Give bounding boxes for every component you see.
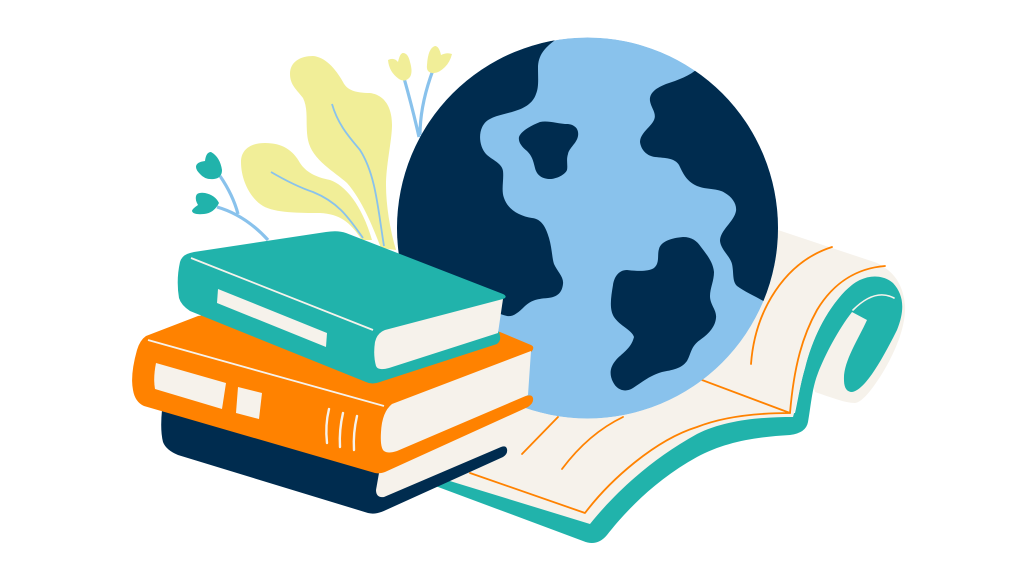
orange book (132, 300, 533, 473)
continent: right (640, 70, 778, 301)
open book (430, 228, 905, 543)
navy pages (376, 420, 505, 497)
plants (192, 46, 452, 250)
tulip: yellow left (388, 53, 412, 81)
small leaf (241, 143, 372, 240)
book page roll (back) (778, 230, 905, 403)
orange cover (132, 300, 533, 473)
teal book cover (430, 276, 902, 543)
illustration: globe, books and plants (132, 38, 905, 543)
orange small label (236, 387, 262, 419)
orange pages (381, 351, 531, 452)
teal cover (178, 231, 506, 384)
book page (440, 228, 877, 524)
book stack (132, 231, 533, 514)
navy cover (161, 410, 507, 514)
teal label (217, 289, 327, 347)
continent: central island (519, 121, 578, 179)
big leaf (290, 56, 396, 250)
globe (397, 38, 778, 418)
orange label (154, 363, 226, 409)
big leaf vein (332, 104, 384, 246)
tulip stems: teal (217, 176, 268, 240)
small leaf vein (271, 172, 363, 238)
navy book (161, 410, 507, 514)
spine stripes (326, 409, 357, 450)
teal spine line (191, 258, 373, 330)
teal pages (374, 299, 503, 369)
tulip: teal top (196, 152, 222, 179)
teal book (178, 231, 506, 384)
continent: lower (611, 237, 716, 390)
tulip: teal lower (192, 193, 219, 214)
tulip: yellow right (427, 46, 452, 73)
page lines (470, 247, 885, 513)
tulip stems: yellow (404, 70, 433, 137)
continent: left (397, 40, 564, 316)
highlight on roll (853, 295, 894, 310)
ocean (397, 38, 778, 418)
orange spine line (148, 340, 384, 406)
